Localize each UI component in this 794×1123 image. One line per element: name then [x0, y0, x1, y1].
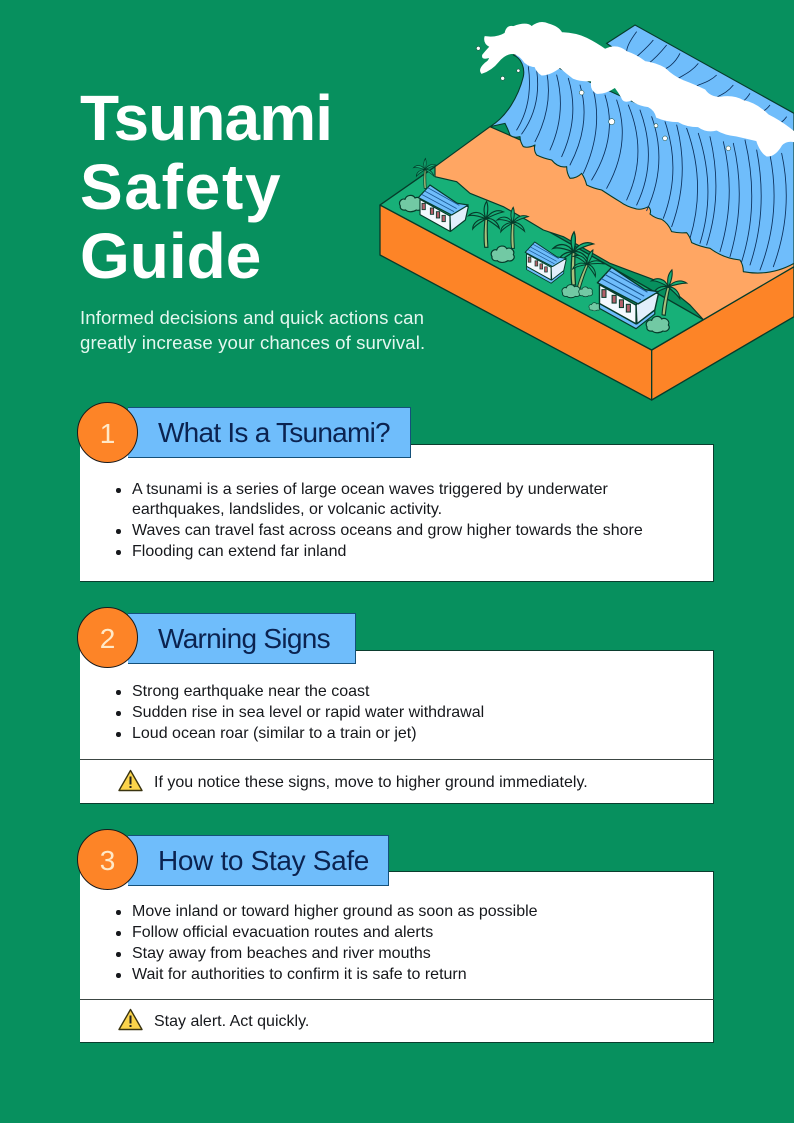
palm trees — [414, 158, 688, 318]
panel 2 bullet: Strong earthquake near the coast — [132, 683, 370, 700]
panel 2 number: 2 — [100, 623, 115, 654]
panel 3 number: 3 — [100, 845, 115, 876]
panel 3 number — [77, 829, 138, 890]
bushes — [400, 195, 669, 333]
wave body — [490, 53, 794, 273]
land block — [380, 167, 794, 400]
panel 2 heading — [128, 613, 356, 664]
panel 1 number: 1 — [100, 418, 115, 449]
panel 3 body — [80, 871, 714, 1043]
panel 2 bullet: Loud ocean roar (similar to a train or jet) — [132, 725, 417, 742]
panel 2 bullet: Sudden rise in sea level or rapid water withdrawal — [132, 704, 484, 721]
panel 2 number — [77, 607, 138, 668]
icon: warning triangle — [118, 770, 143, 792]
houses — [418, 185, 658, 329]
panel 1 bullet: Flooding can extend far inland — [132, 543, 346, 560]
title: Safety — [80, 151, 282, 223]
panel 1 heading: What Is a Tsunami? — [158, 417, 390, 448]
sand beach — [435, 127, 794, 320]
panel 1 number — [77, 402, 138, 463]
back water surface — [607, 25, 794, 137]
title — [80, 82, 332, 292]
illustration: tsunami wave over isometric coast — [379, 22, 794, 401]
panel 2 body — [80, 650, 714, 804]
wave lines — [517, 67, 786, 270]
panel 2 heading: Warning Signs — [158, 623, 330, 654]
panel 1 bullet: A tsunami is a series of large ocean waves triggered by underwater — [132, 481, 608, 498]
title: Guide — [80, 220, 261, 292]
panel 2 note: If you notice these signs, move to higher ground immediately. — [154, 774, 588, 791]
panel 1 bullet continuation: earthquakes, landslides, or volcanic activity. — [132, 501, 442, 518]
foam crest — [481, 22, 794, 156]
subtitle: Informed decisions and quick actions can — [80, 307, 424, 328]
panel 3 bullet: Stay away from beaches and river mouths — [132, 945, 431, 962]
panel 3 heading — [128, 835, 389, 886]
title: Tsunami — [80, 82, 332, 154]
icon: warning triangle — [118, 1008, 143, 1030]
panel 3 heading: How to Stay Safe — [158, 845, 369, 876]
subtitle — [80, 307, 425, 353]
panel 1 bullet: Waves can travel fast across oceans and grow higher towards the shore — [132, 522, 643, 539]
panel 3 bullet: Follow official evacuation routes and alerts — [132, 924, 433, 941]
subtitle: greatly increase your chances of survival. — [80, 332, 425, 353]
panel 1 heading — [128, 407, 411, 458]
panel 3 bullet: Wait for authorities to confirm it is safe to return — [132, 966, 467, 983]
foam bubbles — [476, 46, 731, 151]
panel 3 note: Stay alert. Act quickly. — [154, 1013, 309, 1030]
panel 3 bullet: Move inland or toward higher ground as soon as possible — [132, 903, 538, 920]
panel 1 body — [80, 444, 714, 582]
